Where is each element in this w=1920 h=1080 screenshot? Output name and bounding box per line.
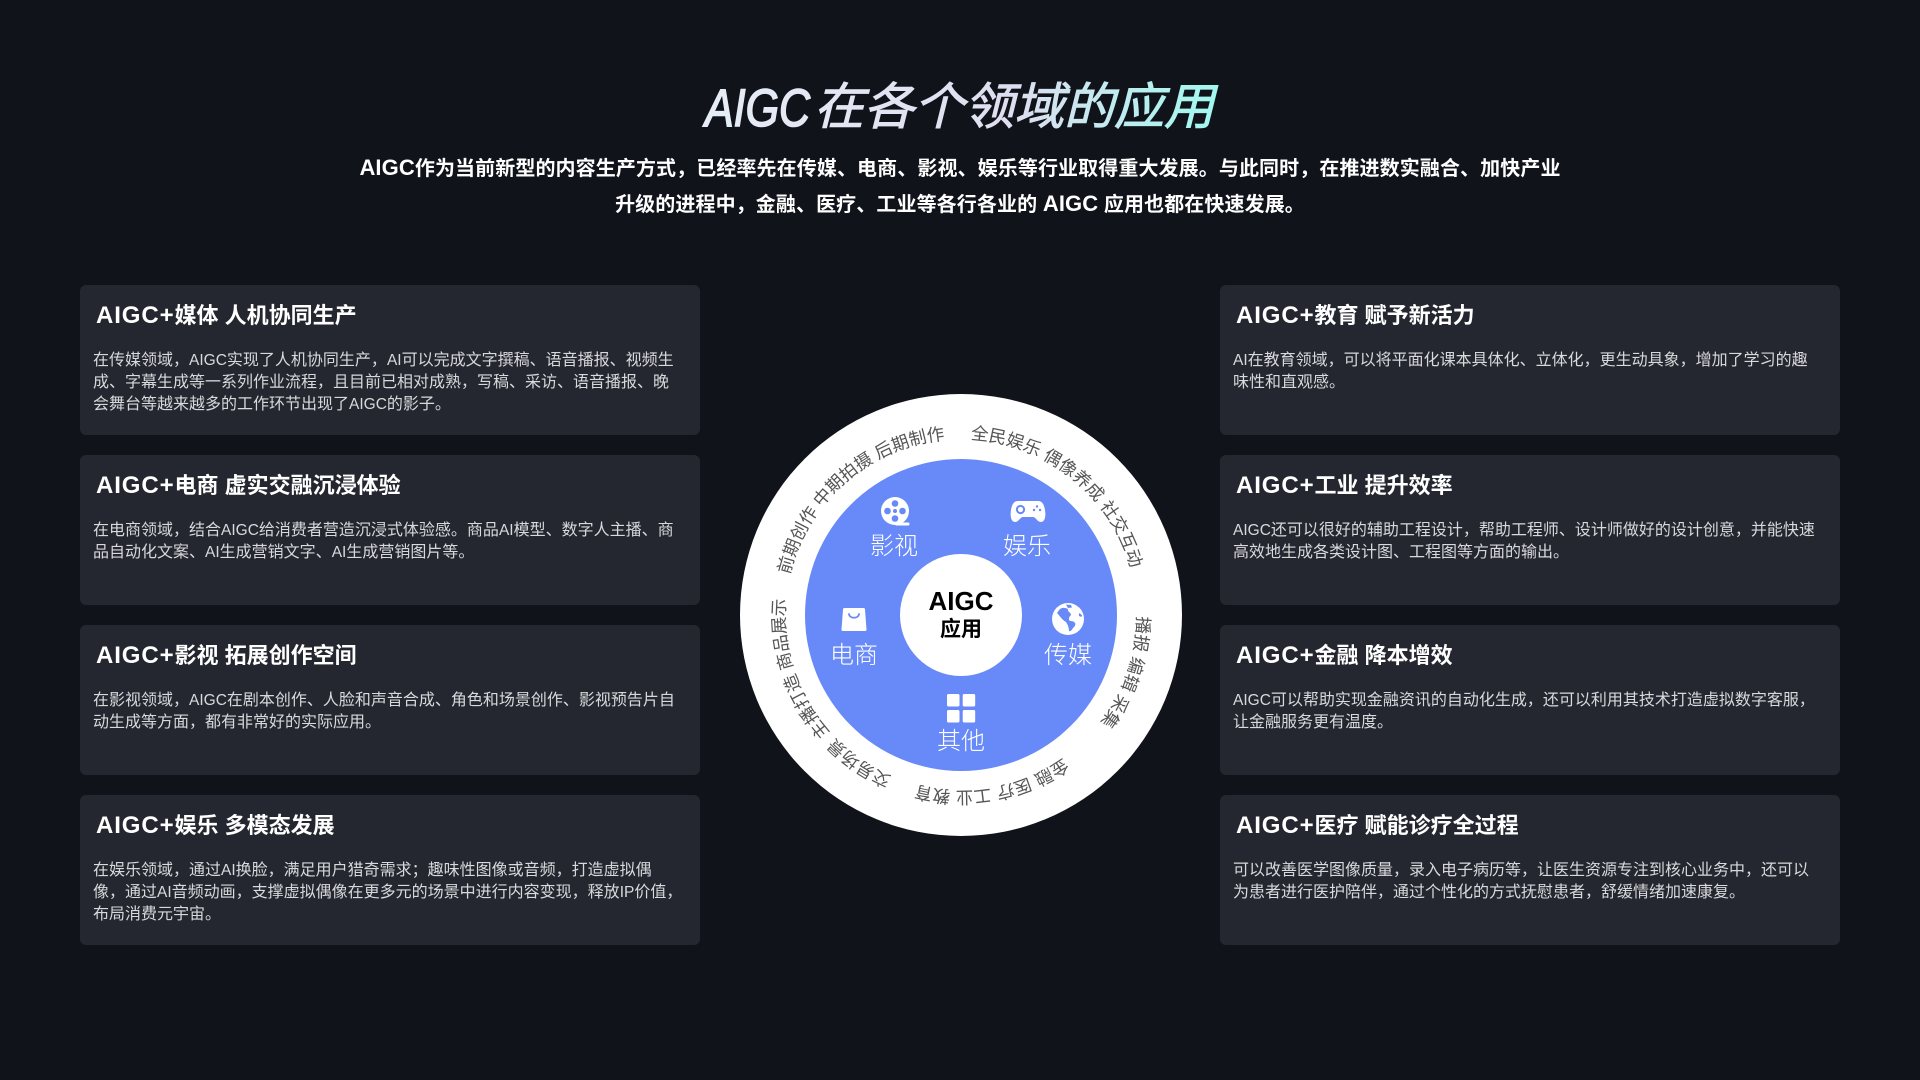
ring label: 传媒 stages: 播报 编辑 采集 <box>1100 616 1152 728</box>
text: 娱乐 <box>93 861 682 923</box>
icon: gamepad <box>1011 501 1045 522</box>
text: 教育 <box>1233 351 1808 391</box>
heading: 影视: AIGC+影视 拓展创作空间 <box>96 642 357 669</box>
panel: AIGC+金融 <box>1220 625 1840 775</box>
panel: AIGC+娱乐 <box>80 795 700 945</box>
text: 电商: 品自动化文案、AI生成营销文字、AI生成营销图片等。 <box>93 544 474 561</box>
heading: 媒体: AIGC+媒体 人机协同生产 <box>96 302 357 329</box>
text: 媒体: 成、字幕生成等一系列作业流程，且目前已相对成熟，写稿、采访、语音播报、晚 <box>93 374 669 391</box>
text: 电商 <box>93 521 674 561</box>
ring label: 娱乐 stages: 全民娱乐 偶像养成 社交互动 <box>972 425 1144 567</box>
text: 工业 <box>1233 521 1815 561</box>
panel: AIGC+教育 <box>1220 285 1840 435</box>
text: 教育: AI在教育领域，可以将平面化课本具体化、立体化，更生动具象，增加了学习的趣 <box>1233 352 1808 369</box>
panel: AIGC+工业 <box>1220 455 1840 605</box>
text: 媒体: 在传媒领域，AIGC实现了人机协同生产，AI可以完成文字撰稿、语音播报、视频生 <box>93 352 674 369</box>
blue ring <box>805 459 1117 771</box>
center circle <box>900 554 1022 676</box>
icon: grid <box>947 694 975 722</box>
text: 媒体 <box>93 351 674 413</box>
subtitle: AIGC作为当前新型的内容生产方式，已经率先在传媒、电商、影视、娱乐等行业取得重大发展。与此同时，在推进数实融合、加快产业 <box>359 155 1561 180</box>
radial diagram <box>740 394 1182 836</box>
text: 金融: AIGC可以帮助实现金融资讯的自动化生成，还可以利用其技术打造虚拟数字客服， <box>1233 692 1815 709</box>
label: 影视: 影视 <box>870 533 918 560</box>
text: 工业: AIGC还可以很好的辅助工程设计，帮助工程师、设计师做好的设计创意，并能快速 <box>1233 522 1815 539</box>
ring label: 影视 stages: 前期创作 中期拍摄 后期制作 <box>776 426 944 574</box>
text: 影视: 动生成等方面，都有非常好的实际应用。 <box>93 714 381 731</box>
text: 影视 <box>93 691 675 731</box>
center circle: AIGC <box>928 586 994 616</box>
panel: AIGC+媒体 <box>80 285 700 435</box>
heading: 娱乐: AIGC+娱乐 多模态发展 <box>96 812 335 839</box>
text: 工业: 高效地生成各类设计图、工程图等方面的输出。 <box>1233 544 1569 561</box>
heading: 电商: AIGC+电商 虚实交融沉浸体验 <box>96 472 401 499</box>
icon: globe <box>1052 603 1084 635</box>
text: 媒体: 会舞台等越来越多的工作环节出现了AIGC的影子。 <box>93 396 451 413</box>
text: 金融: 让金融服务更有温度。 <box>1233 714 1393 731</box>
ring label: 交易场景: 交易场景 <box>827 738 892 788</box>
label: 其他: 其他 <box>937 728 985 755</box>
text: 电商: 在电商领域，结合AIGC给消费者营造沉浸式体验感。商品AI模型、数字人主播、商 <box>93 522 674 539</box>
text: 影视: 在影视领域，AIGC在剧本创作、人脸和声音合成、角色和场景创作、影视预告片自 <box>93 692 675 709</box>
panel: AIGC+电商 <box>80 455 700 605</box>
subtitle <box>359 155 1561 216</box>
heading: 教育: AIGC+教育 赋予新活力 <box>1236 302 1475 329</box>
text: 金融 <box>1233 691 1815 731</box>
text: 娱乐: 布局消费元宇宙。 <box>93 906 221 923</box>
subtitle: 升级的进程中，金融、医疗、工业等各行各业的 AIGC 应用也都在快速发展。 <box>615 191 1305 216</box>
heading: 医疗: AIGC+医疗 赋能诊疗全过程 <box>1236 812 1519 839</box>
ring label: 电商 stages: 主播打造 商品展示 <box>771 600 830 738</box>
text: 娱乐: 在娱乐领域，通过AI换脸，满足用户猎奇需求；趣味性图像或音频，打造虚拟偶 <box>93 862 652 879</box>
text: 教育: 味性和直观感。 <box>1233 374 1345 391</box>
ring label: 其他 stages: 金融 医疗 工业 教育 <box>914 758 1068 806</box>
center circle: 应用 <box>940 617 982 641</box>
title: AIGC <box>703 79 811 138</box>
heading: 金融: AIGC+金融 降本增效 <box>1236 642 1453 669</box>
text: 医疗 <box>1233 861 1809 901</box>
text: 医疗: 为患者进行医护陪伴，通过个性化的方式抚慰患者，舒缓情绪加速康复。 <box>1233 884 1745 901</box>
heading: 工业: AIGC+工业 提升效率 <box>1236 472 1453 499</box>
panel: AIGC+影视 <box>80 625 700 775</box>
outer white ring <box>740 394 1182 836</box>
label: 娱乐: 娱乐 <box>1003 533 1051 560</box>
text: 娱乐: 像，通过AI音频动画，支撑虚拟偶像在更多元的场景中进行内容变现，释放IP价值， <box>93 884 682 901</box>
text: 医疗: 可以改善医学图像质量，录入电子病历等，让医生资源专注到核心业务中，还可以 <box>1233 862 1809 879</box>
label: 电商: 电商 <box>830 642 878 669</box>
icon: film reel <box>881 497 910 526</box>
icon: shopping bag <box>841 608 867 631</box>
label: 传媒: 传媒 <box>1044 642 1092 669</box>
panel: AIGC+医疗 <box>1220 795 1840 945</box>
